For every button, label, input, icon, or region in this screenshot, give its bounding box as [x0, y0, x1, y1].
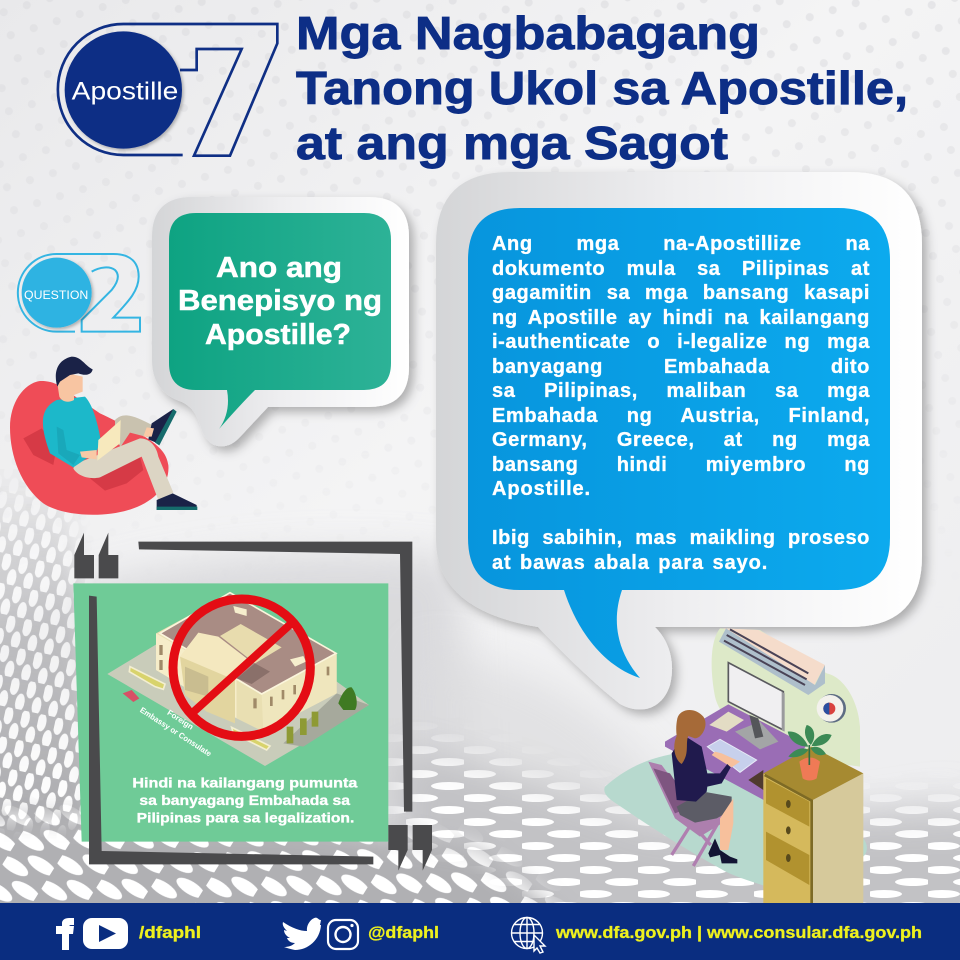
- answer text: Embahada ng Austria, Finland,: [492, 404, 870, 426]
- desk: [665, 704, 807, 802]
- panel: embassy callout: [73, 533, 432, 871]
- keyboard: [707, 739, 757, 772]
- title: Tanong Ukol sa Apostille,: [296, 62, 908, 114]
- icon: twitter: [283, 918, 321, 950]
- beanbag: [10, 381, 168, 515]
- twitter instagram handle: @dfaphl: [368, 923, 439, 942]
- footer bar: [0, 903, 960, 960]
- illustration: man on beanbag: [10, 357, 197, 515]
- frame: [89, 542, 412, 864]
- speech bubble: question: [152, 197, 409, 446]
- icon: youtube: [83, 918, 128, 949]
- building label: Foreign: [166, 708, 195, 732]
- answer text: ng Apostille ay hindi na kailangang: [492, 306, 870, 328]
- caption: [132, 775, 358, 825]
- bubble fill: [468, 208, 890, 678]
- air conditioner: [723, 628, 825, 687]
- seal: [817, 694, 846, 723]
- title: at ang mga Sagot: [296, 117, 728, 169]
- head: [57, 373, 83, 402]
- answer text: gagamitin sa mga bansang kasapi: [492, 282, 870, 304]
- answer text: Apostille.: [492, 478, 591, 500]
- answer text: Ibig sabihin, mas maikling proseso: [492, 527, 870, 549]
- title: Mga Nagbabagang: [296, 7, 760, 59]
- logo: Apostille 7: [58, 24, 277, 156]
- building label: Embassy or Consulate: [138, 705, 213, 759]
- icon: facebook: [56, 918, 74, 950]
- caption: sa banyagang Embahada sa: [139, 793, 350, 808]
- icon: globe with cursor: [512, 918, 545, 953]
- bubble shell: [436, 172, 922, 710]
- legs: [115, 415, 154, 447]
- website links: www.dfa.gov.ph | www.consular.dfa.gov.ph: [555, 923, 922, 942]
- cabinet: [812, 773, 863, 903]
- plant: [799, 757, 820, 780]
- opening quote mark: [74, 533, 118, 578]
- caption: Hindi na kailangang pumunta: [132, 775, 358, 790]
- answer text: dokumento mula sa Pilipinas at: [492, 258, 870, 280]
- chair: [672, 817, 722, 866]
- question 2 badge: [18, 254, 140, 332]
- question 2 badge: QUESTION: [24, 288, 88, 302]
- answer text: bansang hindi miyembro ng: [492, 454, 870, 476]
- icon: instagram: [328, 920, 358, 949]
- answer text: sa Pilipinas, maliban sa mga: [492, 380, 870, 402]
- question text: Benepisyo ng: [178, 285, 382, 317]
- facebook youtube handle: /dfaphl: [139, 923, 201, 942]
- answer text: i-authenticate o i-legalize ng mga: [492, 331, 870, 353]
- laptop: [97, 420, 121, 461]
- title: [296, 7, 908, 169]
- speech bubble: answer: [436, 172, 922, 710]
- question text: Apostille?: [205, 319, 351, 351]
- green card: [73, 583, 388, 842]
- torso: [43, 397, 101, 467]
- illustration: embassy building: [107, 593, 369, 766]
- logo: Apostille 7: Apostille: [72, 78, 178, 105]
- wall and floor: [712, 628, 860, 767]
- answer text: at bawas abala para sayo.: [492, 552, 768, 574]
- prohibition sign: [173, 599, 310, 736]
- answer text: [492, 233, 870, 574]
- illustration: woman at desk: [604, 628, 867, 903]
- bubble shell: [152, 197, 409, 446]
- answer text: Germany, Greece, at ng mga: [492, 429, 870, 451]
- monitor: [728, 663, 783, 730]
- answer text: banyagang Embahada dito: [492, 356, 870, 378]
- question text: [178, 252, 382, 351]
- answer text: Ang mga na-Apostillize na: [492, 233, 870, 255]
- shoes: [148, 409, 197, 510]
- bubble fill: [169, 213, 391, 429]
- caption: Pilipinas para sa legalization.: [137, 810, 354, 825]
- woman: [677, 792, 732, 823]
- closing quote mark: [388, 825, 432, 871]
- question text: Ano ang: [216, 252, 342, 284]
